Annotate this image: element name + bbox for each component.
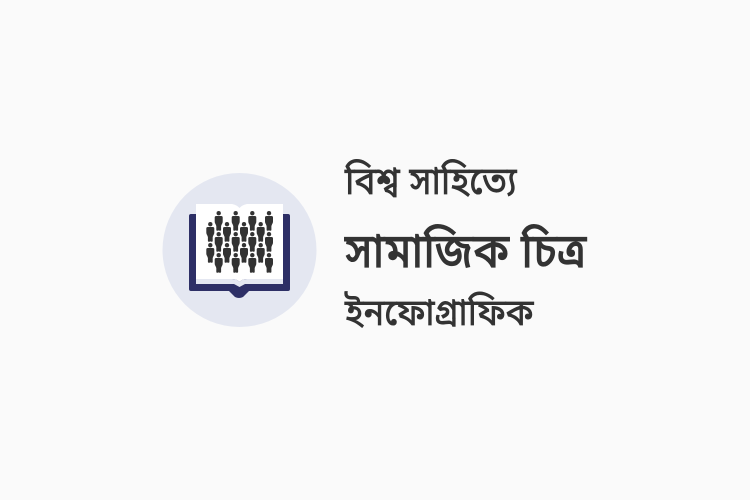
page edge <box>196 279 283 287</box>
heading line 2: সামাজিক চিত্র <box>345 226 586 278</box>
circle background <box>162 173 316 327</box>
heading line 3: ইনফোগ্রাফিক <box>345 293 533 334</box>
book pages <box>196 204 283 282</box>
book cover <box>189 214 290 298</box>
heading line 1: বিশ্ব সাহিত্যে <box>345 160 517 203</box>
people <box>206 211 273 273</box>
